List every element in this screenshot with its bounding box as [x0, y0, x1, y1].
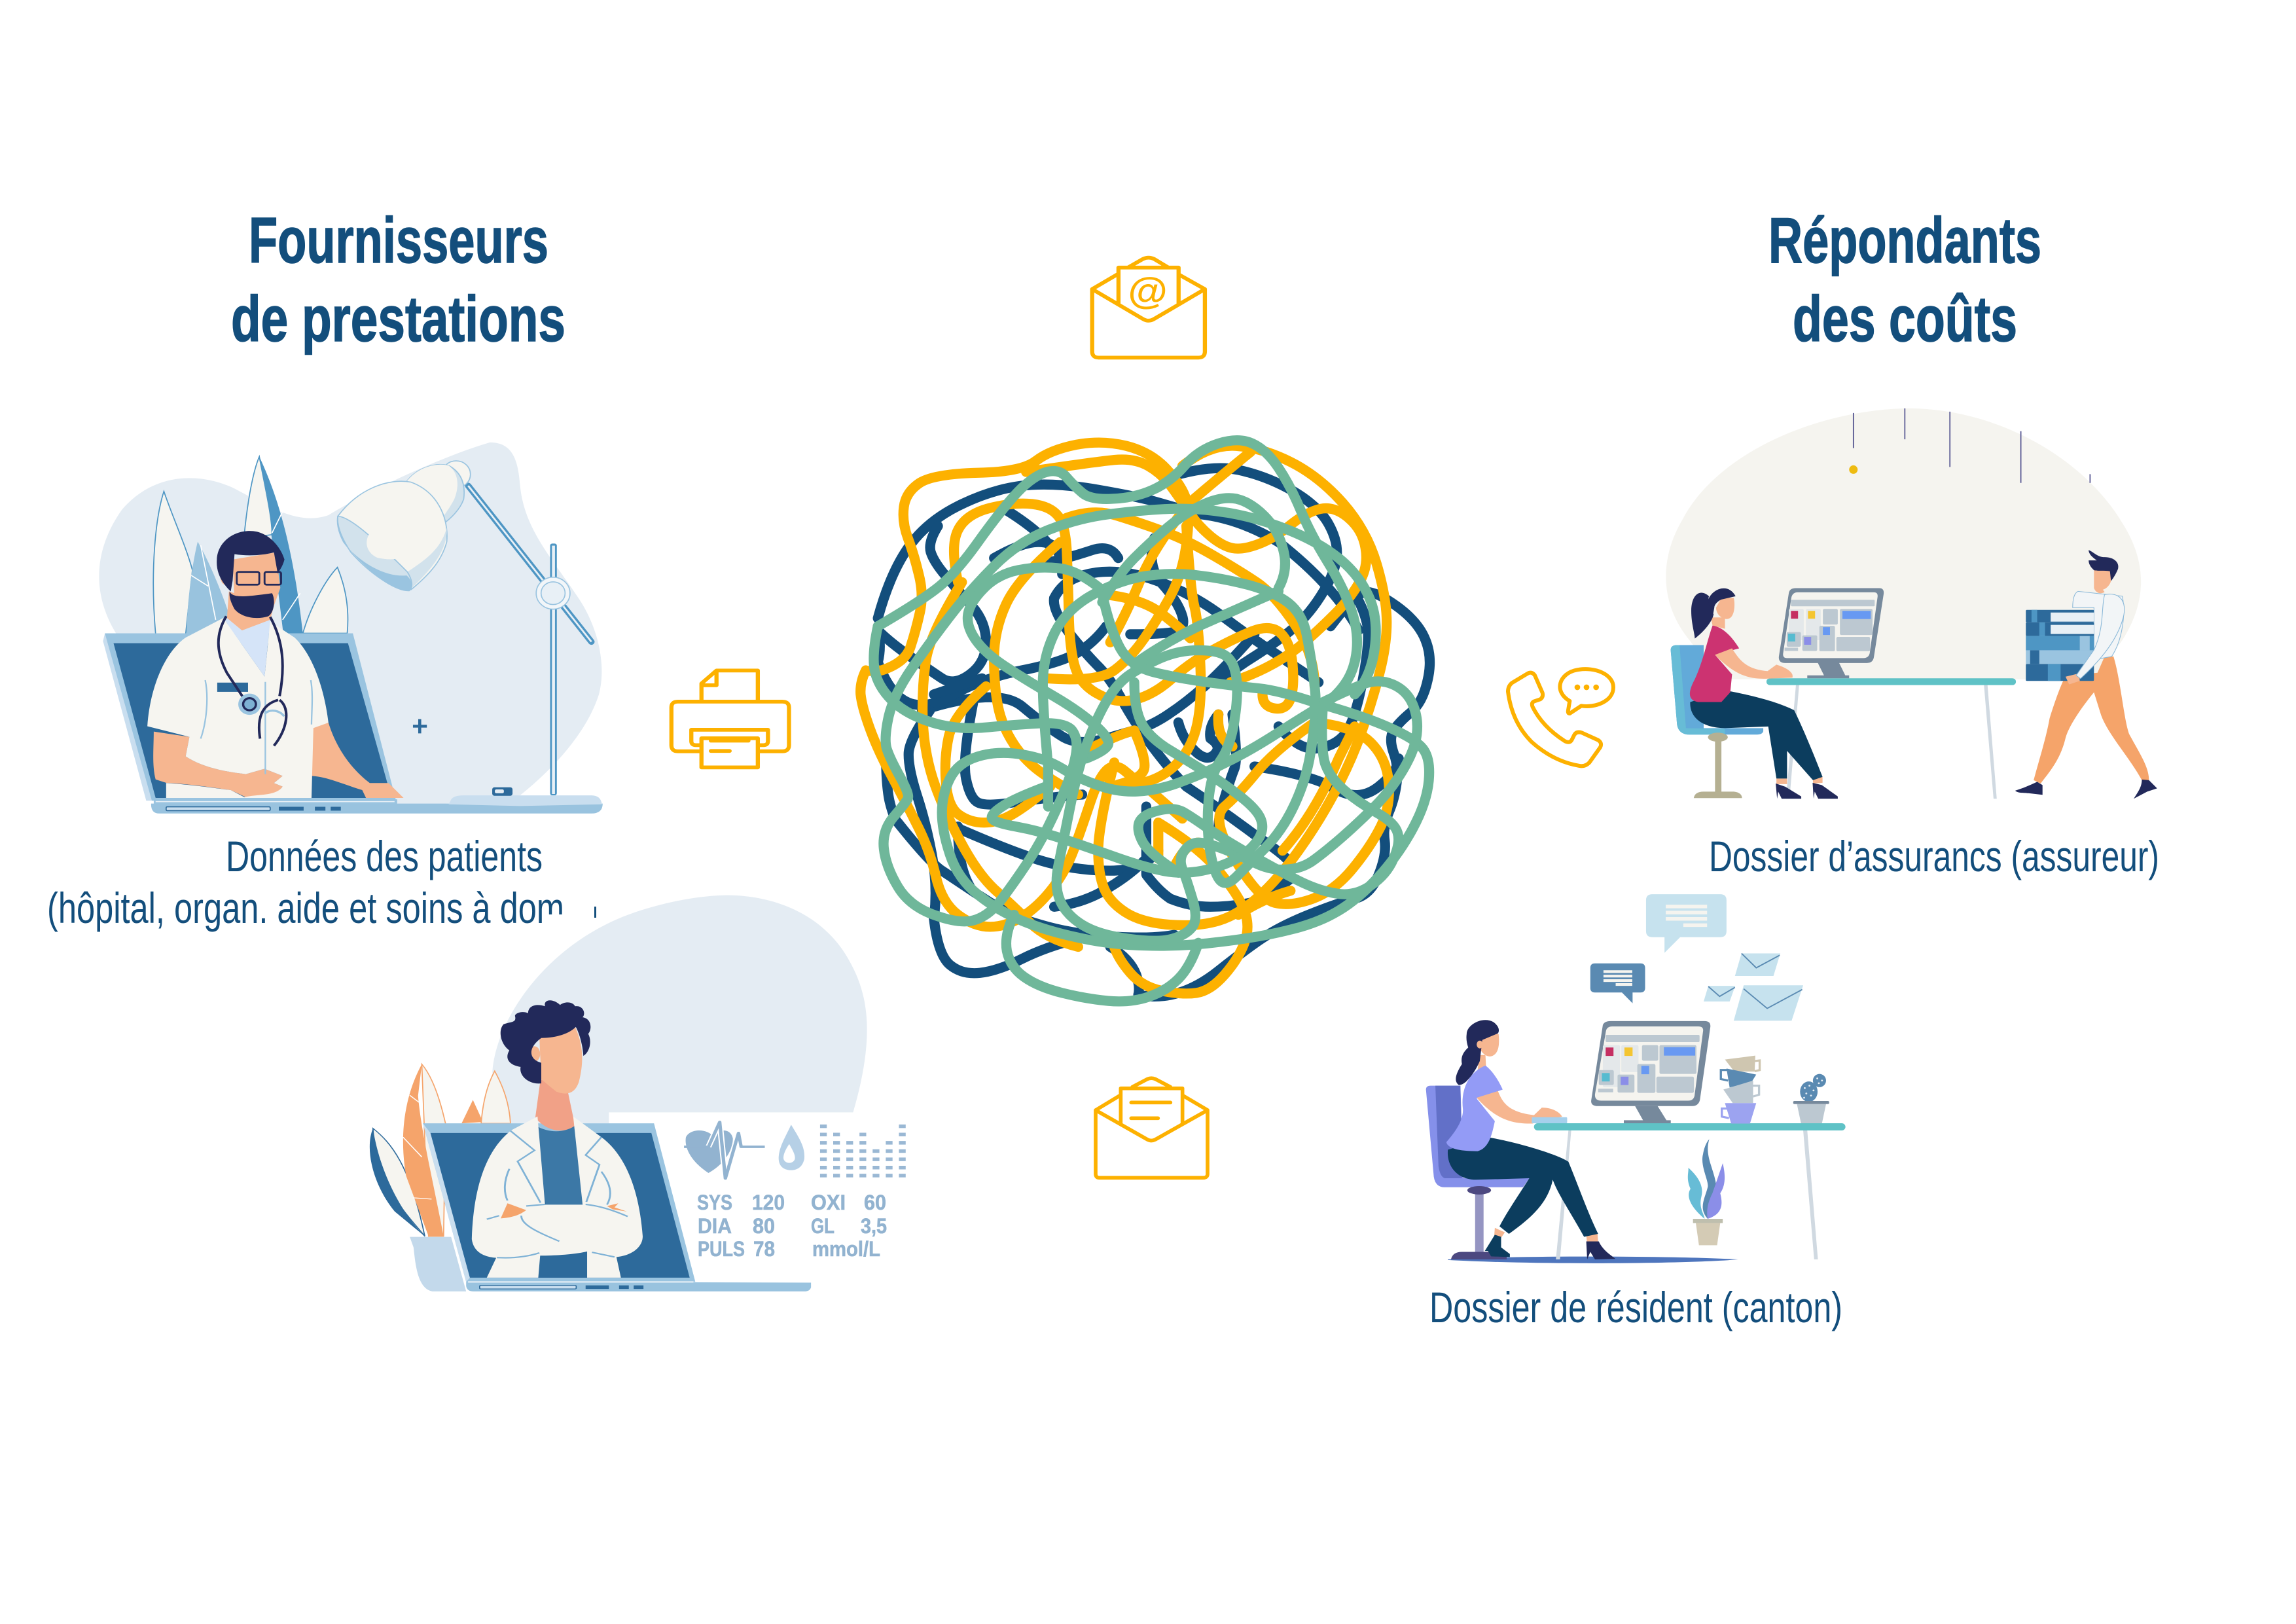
vitals readings text: GL: [811, 1214, 834, 1238]
illustration: woman at desk and man carrying files: [1666, 408, 2157, 799]
vitals readings text: 3,5: [861, 1214, 887, 1238]
illustration: woman at desk with messages: [1426, 894, 1846, 1263]
lamp: [338, 461, 592, 795]
navy lines: [878, 468, 1429, 996]
computer monitor: [1591, 1021, 1710, 1123]
desk: [1767, 678, 2016, 799]
vitals readings text: 78: [753, 1237, 775, 1261]
heading: Fournisseurs de prestations: de prestations: [231, 283, 565, 355]
heading: Fournisseurs de prestations: [231, 204, 565, 355]
vitals readings text: [697, 1191, 887, 1261]
laptop: [103, 633, 603, 814]
heading: Répondants des coûts: des coûts: [1793, 283, 2017, 355]
heading: Fournisseurs de prestations: Fournisseurs: [249, 204, 548, 276]
seated woman: [1426, 1020, 1615, 1259]
speech bubbles: [1590, 894, 1727, 1003]
heading: Répondants des coûts: Répondants: [1768, 204, 2041, 276]
man carrying stacked files: [2015, 550, 2157, 799]
caption: Données des patients: [47, 832, 596, 933]
icon: printer: [672, 670, 789, 767]
caption: Données des patients: Données des patients: [226, 832, 543, 880]
heading: Répondants des coûts: [1768, 204, 2041, 355]
illustration: doctor with arms crossed and vitals: [370, 895, 906, 1291]
vitals readings text: 80: [753, 1214, 775, 1238]
icon: email with at sign: [1092, 258, 1205, 357]
vitals readings text: 120: [752, 1191, 785, 1214]
potted plant: [1688, 1139, 1725, 1245]
doctor figure: [472, 1000, 643, 1278]
envelopes: [1704, 954, 1803, 1020]
vitals readings text: PULS: [698, 1237, 745, 1261]
caption: Dossier d'assurancs (assureur): Dossier d’assurancs (assureur): [1709, 832, 2159, 880]
amber lines: [861, 442, 1389, 994]
caption: Dossier de résident (canton): Dossier de résident (canton): [1429, 1283, 1842, 1331]
caption: Données des patients: (hôpital, organ. aide et soins à dom: [47, 884, 564, 932]
vitals icons: [684, 1122, 906, 1178]
vitals readings text: SYS: [697, 1191, 732, 1214]
icon: email with at sign: @: [1128, 270, 1168, 312]
green lines: [874, 441, 1429, 1001]
computer monitor: [1779, 588, 1884, 678]
desk: [1534, 1123, 1846, 1259]
vitals readings text: 60: [864, 1191, 886, 1214]
tangle of navy, amber and green lines: [861, 441, 1429, 1001]
icon: phone with speech bubble: [1508, 669, 1613, 766]
seated woman: [1671, 588, 1838, 799]
stacked cups: [1721, 1056, 1760, 1123]
icon: open envelope with letter: [1096, 1078, 1208, 1178]
doctor figure: [147, 531, 404, 798]
illustration: doctor at laptop with lamp: [99, 442, 603, 814]
laptop: [423, 1123, 811, 1291]
vitals readings text: mmol/L: [812, 1237, 880, 1261]
vitals readings text: DIA: [698, 1214, 732, 1238]
plants: [370, 1064, 511, 1291]
cactus: [1793, 1074, 1829, 1123]
vitals readings text: OXI: [811, 1191, 846, 1214]
